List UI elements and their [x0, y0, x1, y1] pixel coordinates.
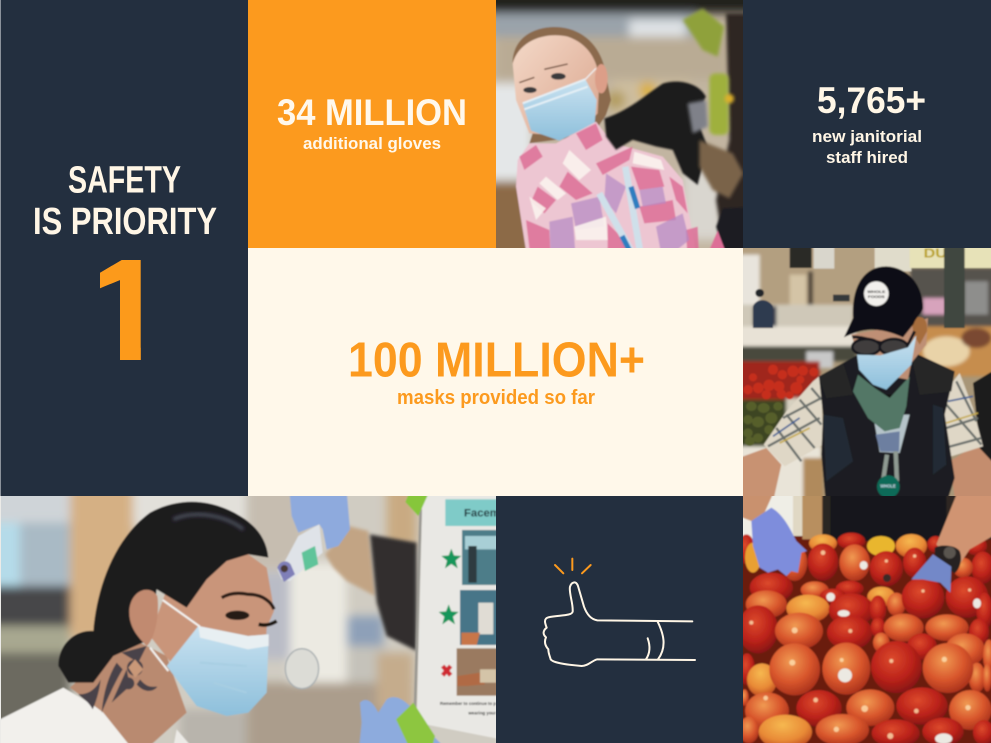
caption: masks provided so far: masks provided so far — [397, 387, 595, 409]
vest — [819, 351, 955, 509]
left arm and glove — [743, 496, 773, 522]
shirt front and neck scarf — [873, 415, 910, 453]
large number 1: 1 — [78, 235, 156, 392]
glasses — [852, 331, 915, 345]
caption: new janitorial staff hired: new janitorial — [812, 128, 922, 146]
ear — [129, 590, 158, 646]
apple highlights and stickers — [749, 550, 971, 739]
shirt — [515, 121, 692, 248]
photo: gloved hands arranging apples — [730, 483, 991, 743]
lanyard — [599, 167, 641, 257]
lanyard and badge — [883, 451, 897, 481]
black glove — [604, 81, 708, 185]
right arm and watch — [936, 496, 991, 562]
lower glove — [358, 696, 441, 743]
icon: hand outline — [544, 582, 695, 666]
mask — [857, 335, 916, 390]
brows and eyes — [222, 593, 274, 609]
panel: 5,765+ janitorial staff — [743, 0, 991, 248]
photo: grocery worker in whole foods cap: DU — [924, 245, 947, 260]
round reflection — [285, 649, 319, 689]
reflected arm and face — [325, 526, 375, 596]
photo: woman having temperature checked: wearing your — [467, 710, 496, 715]
glove and thermometer — [289, 496, 351, 550]
photo: grocery worker in whole foods cap: FOODS — [868, 294, 885, 299]
photo: woman having temperature checked: Facem — [464, 508, 500, 520]
hair — [513, 27, 611, 143]
caption: new janitorial staff hired — [812, 128, 922, 167]
caption: new janitorial staff hired: staff hired — [826, 149, 908, 167]
shirt — [1, 686, 128, 743]
photo: grocery worker in whole foods cap: WHOLE — [880, 483, 896, 488]
mask — [523, 79, 597, 141]
cap — [844, 266, 923, 337]
mask — [167, 626, 269, 716]
heading: safety is priority — [33, 160, 217, 243]
far right person — [973, 372, 991, 470]
heading: safety is priority: IS PRIORITY — [33, 201, 217, 243]
head — [851, 318, 928, 380]
heading: safety is priority: SAFETY — [68, 160, 181, 202]
photo: grocery worker in whole foods cap: WHOLE — [867, 289, 886, 294]
face — [513, 35, 599, 137]
photo: woman having temperature checked: Remember to continue to p — [440, 701, 496, 706]
caption: additional gloves: additional gloves — [303, 135, 441, 153]
plaid sleeves — [764, 375, 823, 466]
panel: 100 million masks — [248, 248, 743, 496]
panel: thumbs up icon — [496, 496, 743, 743]
panel: safety is priority 1 — [0, 0, 248, 496]
stat: 34 million: 34 MILLION — [277, 92, 467, 133]
icon: spark lines — [555, 559, 591, 573]
sign — [416, 496, 496, 739]
stat: 100 million+: 100 MILLION+ — [348, 334, 645, 388]
neck tattoo — [78, 646, 157, 713]
icon: thumbs up — [544, 559, 695, 666]
photo: grocery worker in whole foods cap — [743, 248, 991, 496]
hair and bun — [58, 502, 268, 683]
photo: woman having temperature checked — [0, 476, 509, 743]
face — [151, 554, 274, 662]
photo: worker in mask with pink shirt — [496, 0, 743, 248]
arms — [743, 448, 782, 496]
neck — [70, 636, 187, 743]
panel: 34 million gloves — [248, 0, 496, 248]
right glove — [911, 554, 951, 593]
stat: 5,765+: 5,765+ — [817, 80, 926, 121]
green tape — [405, 496, 428, 516]
